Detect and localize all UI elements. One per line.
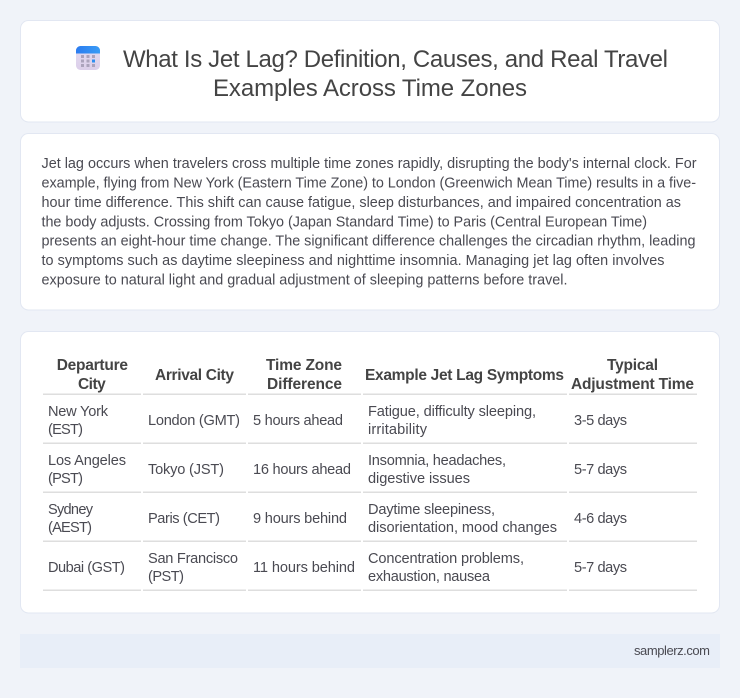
text block: definition: Jet lag occurs when travelers cross multiple time zones rapidly, disrupting the body's internal clock. For — [42, 156, 697, 172]
table row: New York: (EST) — [48, 422, 83, 438]
table row: New York: Fatigue, difficulty sleeping, — [368, 404, 536, 420]
table header row: Difference — [267, 376, 342, 393]
text block: definition: the body adjusts. Crossing from Tokyo (Japan Standard Time) to Paris (Central European Time) — [42, 214, 647, 230]
table row: Sydney: (AEST) — [48, 520, 92, 536]
table row: Los Angeles: Los Angeles — [48, 453, 126, 469]
table header row: City — [78, 376, 106, 393]
table row: Sydney: disorientation, mood changes — [368, 520, 557, 536]
panel: title — [20, 20, 720, 122]
text block: definition: hour time difference. This shift can cause fatigue, sleep disturbances, and impaired concentration as — [42, 195, 681, 211]
table header row: Time Zone — [266, 357, 342, 374]
table row: Sydney: 4-6 days — [574, 511, 627, 527]
table row: Dubai: 11 hours behind — [253, 560, 355, 576]
table header row: Example Jet Lag Symptoms — [365, 367, 564, 384]
text block: definition: to symptoms such as daytime sleepiness and nighttime insomnia. Managing jet lag often involves — [42, 253, 664, 269]
text block: definition: exposure to natural light and gradual adjustment of sleeping patterns before travel. — [42, 273, 568, 289]
table row: Sydney: Sydney — [48, 502, 94, 518]
table row: New York: New York — [48, 404, 109, 420]
table row: Sydney: Paris (CET) — [148, 511, 220, 527]
footer bar: samplerz.com — [634, 643, 710, 658]
table row: Dubai: (PST) — [148, 569, 184, 585]
table row: Dubai: San Francisco — [148, 551, 238, 567]
text block: definition — [42, 156, 697, 289]
table row: Los Angeles: (PST) — [48, 471, 83, 487]
table row: Dubai: 5-7 days — [574, 560, 627, 576]
table row: Dubai: exhaustion, nausea — [368, 569, 491, 585]
table header row: Departure — [57, 357, 128, 374]
heading — [123, 46, 668, 102]
table row: Los Angeles: Tokyo (JST) — [148, 462, 224, 478]
table row: Dubai: Concentration problems, — [368, 551, 524, 567]
table row: New York — [43, 404, 697, 444]
text block: definition: example, flying from New York (Eastern Time Zone) to London (Greenwich Mean Time) results in a five- — [42, 175, 696, 191]
table row: New York: London (GMT) — [148, 413, 240, 429]
icon: calendar — [76, 46, 100, 70]
table row: Sydney: Daytime sleepiness, — [368, 502, 495, 518]
text block: definition: presents an eight-hour time change. The significant difference challenges the circadian rhythm, leading — [42, 234, 696, 250]
table row: Sydney — [43, 502, 697, 542]
table row: Dubai: Dubai (GST) — [48, 560, 125, 576]
table header row: Adjustment Time — [571, 376, 694, 393]
table header row: Arrival City — [155, 367, 234, 384]
table header row — [43, 357, 697, 395]
table row: Los Angeles: Insomnia, headaches, — [368, 453, 506, 469]
table row: Los Angeles: digestive issues — [368, 471, 470, 487]
table row: New York: irritability — [368, 422, 428, 438]
table row: Los Angeles: 16 hours ahead — [253, 462, 351, 478]
heading: What Is Jet Lag? Definition, Causes, and Real Travel — [123, 46, 668, 73]
table row: Los Angeles: 5-7 days — [574, 462, 627, 478]
table row: New York: 5 hours ahead — [253, 413, 343, 429]
table row: Dubai — [43, 551, 697, 591]
footer bar — [20, 634, 720, 668]
table header row: Typical — [607, 357, 658, 374]
panel: time zone table — [20, 332, 720, 613]
table row: Sydney: 9 hours behind — [253, 511, 347, 527]
table row: Los Angeles — [43, 453, 697, 493]
panel: definition paragraph — [20, 134, 720, 310]
heading: Examples Across Time Zones — [213, 75, 527, 102]
table row: New York: 3-5 days — [574, 413, 627, 429]
